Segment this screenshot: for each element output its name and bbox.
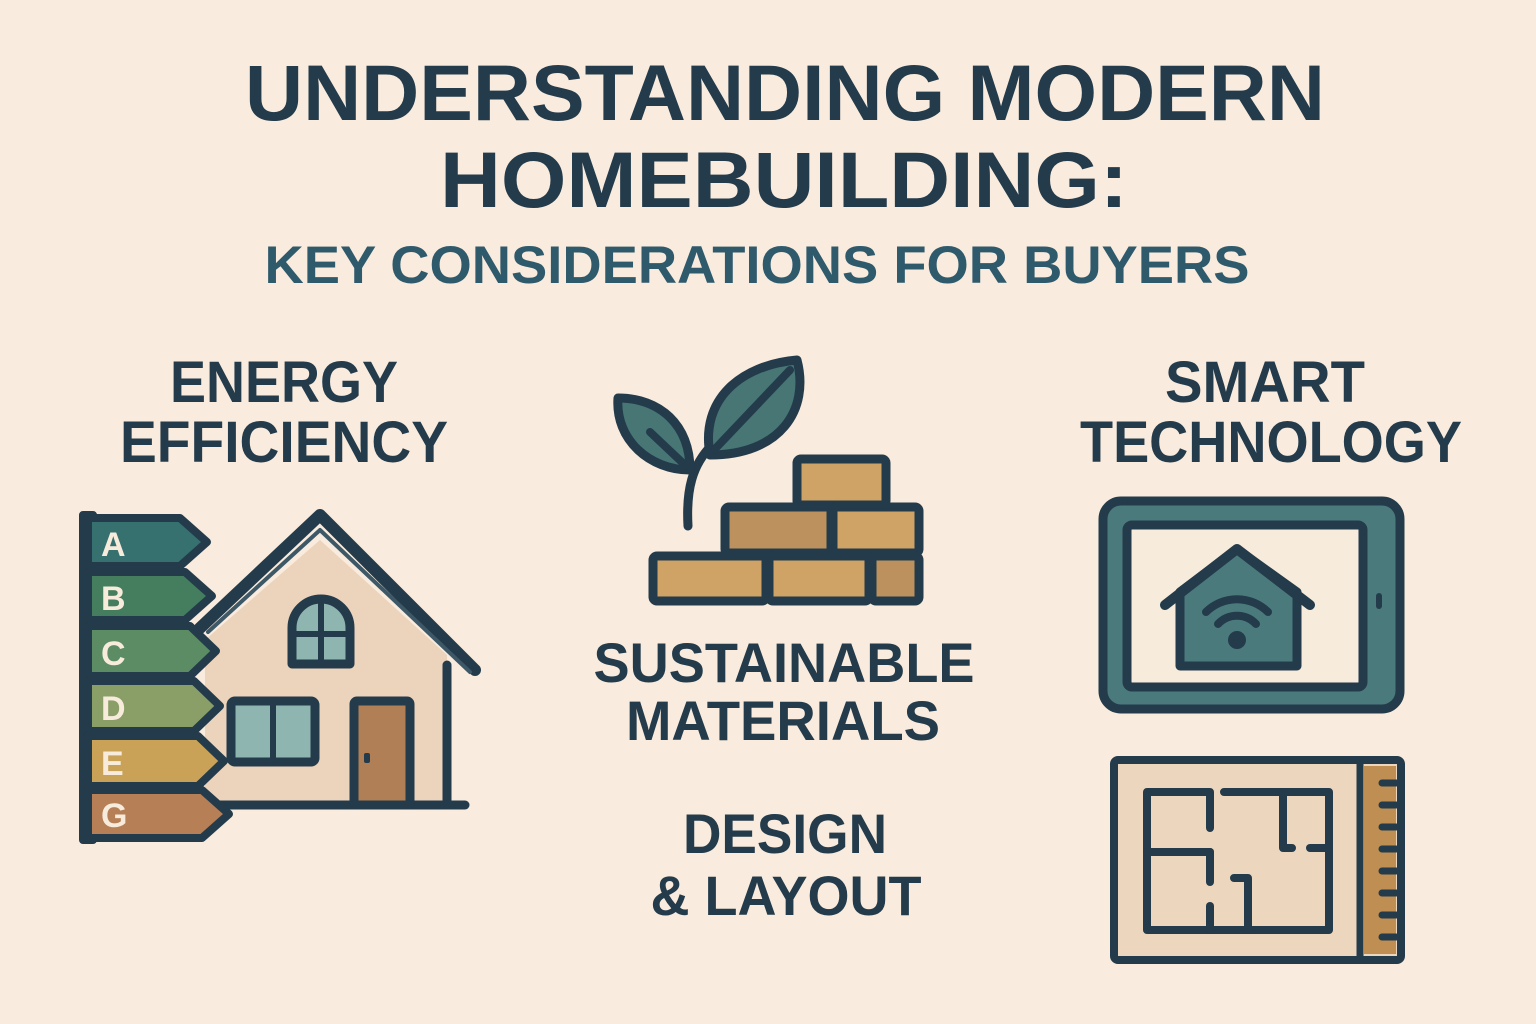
icon: house with energy rating [83, 515, 475, 840]
heading: design & layout [650, 802, 922, 927]
icon: house with energy rating: A [101, 526, 126, 564]
stem [688, 445, 712, 526]
rating bars [83, 515, 229, 840]
icon: leaf and bricks [618, 360, 919, 601]
roof [200, 515, 475, 670]
heading: sustainable materials [594, 631, 974, 752]
subtitle: KEY CONSIDERATIONS FOR BUYERS [264, 236, 1250, 295]
heading: smart technology [1080, 350, 1462, 475]
heading: energy efficiency: EFFICIENCY [120, 410, 448, 475]
icon: floor plan with ruler [1114, 760, 1401, 960]
heading: design & layout: & LAYOUT [650, 864, 922, 927]
heading: sustainable materials: SUSTAINABLE [594, 631, 974, 694]
small leaf [618, 398, 690, 470]
icon: house with energy rating: B [101, 580, 126, 618]
title: HOMEBUILDING: [440, 135, 1128, 224]
title [245, 48, 1325, 224]
heading: smart technology: SMART [1165, 350, 1365, 415]
icon: house with energy rating: D [101, 690, 126, 728]
arched window [292, 599, 350, 664]
door [354, 701, 410, 805]
heading: sustainable materials: MATERIALS [626, 689, 940, 752]
icon: house with energy rating: C [101, 635, 126, 673]
title: UNDERSTANDING MODERN [245, 48, 1325, 137]
lower window [231, 701, 315, 762]
heading: design & layout: DESIGN [683, 802, 887, 865]
bricks [797, 459, 886, 505]
icon: house with energy rating: G [101, 797, 127, 835]
big leaf [708, 360, 800, 455]
heading: smart technology: TECHNOLOGY [1080, 410, 1462, 475]
house walls [205, 540, 447, 805]
heading: energy efficiency [120, 350, 448, 475]
icon: tablet smart home [1103, 501, 1400, 709]
icon: house with energy rating: E [101, 745, 124, 783]
heading: energy efficiency: ENERGY [170, 350, 398, 415]
